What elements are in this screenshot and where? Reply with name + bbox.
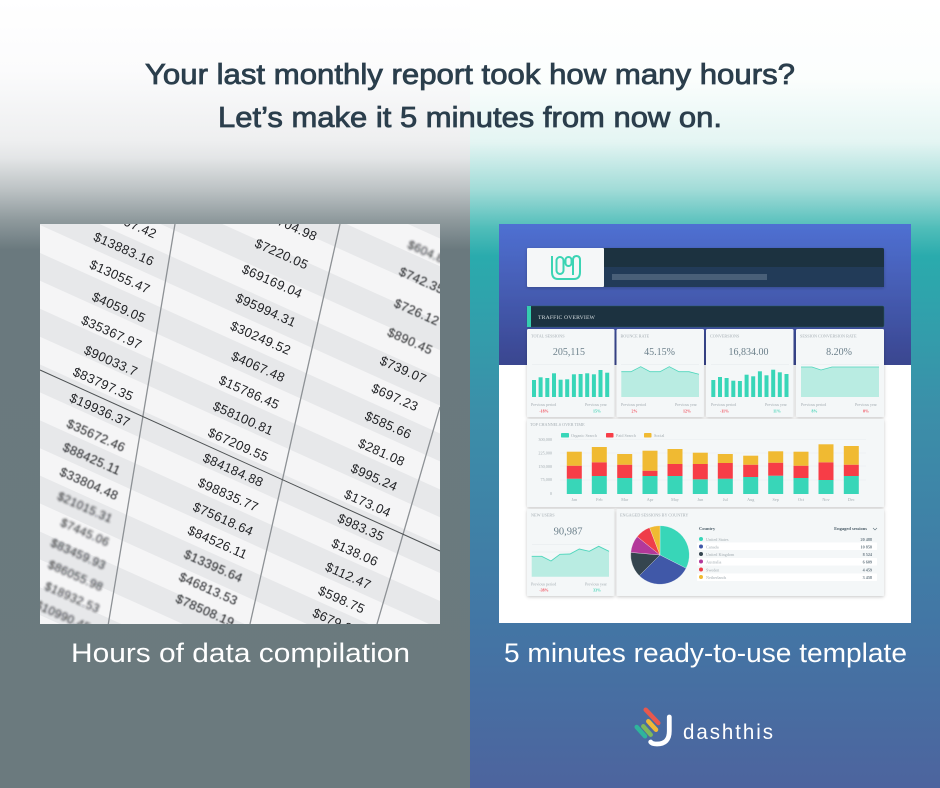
card: total sessions: 205,115 xyxy=(553,347,585,358)
card: total sessions: Previous year xyxy=(585,402,608,407)
y axis: 75,000 xyxy=(540,477,552,483)
sharp numbers: $83797.35 xyxy=(71,364,136,404)
stacked bars xyxy=(567,444,859,494)
card: new users: Previous year xyxy=(585,582,608,586)
x axis months: Jul xyxy=(723,497,729,502)
card: session conversion rate: 8% xyxy=(812,408,818,414)
country table: 6 609 xyxy=(863,560,872,564)
card: total sessions xyxy=(527,329,614,417)
country table: United States xyxy=(706,537,729,542)
card: new users xyxy=(527,509,614,596)
card: session conversion rate xyxy=(796,329,884,417)
sharp numbers: $598.75 xyxy=(316,583,367,617)
card: new users: 90,987 xyxy=(554,526,582,538)
slightly blurred numbers: $35672.46 xyxy=(65,417,127,455)
card: session conversion rate: Previous period xyxy=(801,402,826,407)
sharp numbers: $30249.52 xyxy=(228,318,293,358)
card: bounce rate: 45.15% xyxy=(644,347,675,358)
slightly blurred numbers: $742.35 xyxy=(397,265,446,297)
slightly blurred numbers: $13395.64 xyxy=(182,547,245,585)
dashboard header xyxy=(527,248,884,287)
x axis months: Aug xyxy=(747,497,755,502)
country table: Canada xyxy=(706,544,719,550)
x axis months: Jan xyxy=(572,497,578,502)
card: session conversion rate: 8.20% xyxy=(826,347,852,358)
card: engaged sessions by country xyxy=(616,509,884,596)
section bar: traffic overview xyxy=(527,306,884,327)
country table: 4 459 xyxy=(863,568,872,572)
card: bounce rate xyxy=(616,329,704,417)
sharp numbers: $4059.05 xyxy=(90,289,148,326)
card: bounce rate: Previous year xyxy=(675,402,698,407)
blurred numbers: $18932.53 xyxy=(43,579,102,616)
left background panel xyxy=(0,0,470,788)
panel: dashboard screenshot xyxy=(499,224,911,623)
sharp numbers: $13055.47 xyxy=(87,257,153,297)
country table: Netherlands xyxy=(706,575,727,580)
card: engaged sessions by country: ENGAGED SESSIONS BY COUNTRY xyxy=(620,512,688,518)
sharp numbers: $95994.31 xyxy=(233,290,299,330)
card: conversions: 11% xyxy=(773,408,781,414)
country table: Australia xyxy=(706,560,721,564)
slightly blurred numbers: $88425.11 xyxy=(61,440,123,478)
sharp numbers: $67209.55 xyxy=(206,425,271,465)
sharp numbers: $58100.81 xyxy=(211,398,276,438)
x axis months: May xyxy=(671,497,680,502)
title: Let’s make it 5 minutes from now on. xyxy=(218,102,722,134)
y axis: 0 xyxy=(550,491,552,496)
sharp numbers: $35367.97 xyxy=(79,312,144,352)
caption: right: 5 minutes ready-to-use template xyxy=(504,638,907,668)
sharp numbers: $112.47 xyxy=(323,559,373,592)
sharp numbers: $13883.16 xyxy=(91,229,157,269)
y axis: 150,000 xyxy=(538,464,552,470)
country table: 8 524 xyxy=(863,552,873,557)
chart: top channels over time: TOP CHANNELS OVER TIME xyxy=(530,422,585,427)
country table: United Kingdom xyxy=(706,552,735,557)
x axis months xyxy=(572,497,855,502)
slightly blurred numbers xyxy=(58,265,446,630)
y axis: 225,000 xyxy=(538,450,552,456)
x axis months: Sep xyxy=(773,497,779,502)
country table: 3 458 xyxy=(863,575,872,580)
chart legend: Paid Search xyxy=(616,433,637,438)
icon: dashthis logo xyxy=(637,710,669,744)
card: conversions: Previous year xyxy=(765,402,788,407)
slightly blurred numbers: $46813.53 xyxy=(177,570,240,608)
x axis months: Nov xyxy=(822,497,831,502)
sharp numbers: $69169.04 xyxy=(240,261,305,301)
sharp numbers: $7597.42 xyxy=(101,205,159,241)
card: new users: -38% xyxy=(539,588,549,592)
pie chart xyxy=(631,526,689,584)
card: total sessions: 15% xyxy=(593,408,601,414)
card: session conversion rate: Previous year xyxy=(855,402,878,407)
x axis months: Feb xyxy=(596,497,602,502)
country table: Sweden xyxy=(706,568,720,572)
chart: top channels over time xyxy=(527,419,884,507)
sharp numbers: $25704.98 xyxy=(254,204,320,244)
chart legend xyxy=(561,433,665,438)
x axis months: Apr xyxy=(647,497,654,502)
section bar: traffic overview: TRAFFIC OVERVIEW xyxy=(538,315,596,321)
sharp numbers: $75618.64 xyxy=(191,499,256,539)
sharp numbers: $995.24 xyxy=(349,460,400,494)
card: total sessions: -18% xyxy=(539,408,549,414)
title xyxy=(145,59,795,134)
card: session conversion rate: 0% xyxy=(863,408,869,414)
right background panel xyxy=(470,0,940,788)
sharp numbers xyxy=(67,204,429,639)
sharp numbers: $4067.48 xyxy=(229,348,287,385)
title: Your last monthly report took how many hours? xyxy=(145,59,795,91)
blurred numbers: $7445.06 xyxy=(58,515,112,549)
sharp numbers: $90033.7 xyxy=(82,342,140,379)
sharp numbers: $281.08 xyxy=(356,435,407,469)
card: session conversion rate: SESSION CONVERSION RATE xyxy=(800,334,857,338)
card: conversions: CONVERSIONS xyxy=(710,334,740,338)
chart legend: Social xyxy=(654,433,665,438)
sharp numbers: $585.66 xyxy=(363,408,414,442)
card: total sessions: Previous period xyxy=(531,402,556,407)
card: new users: NEW USERS xyxy=(531,512,555,518)
sharp numbers: $7220.05 xyxy=(253,236,311,272)
blurred numbers: $83459.93 xyxy=(49,536,108,572)
card: new users: 33% xyxy=(593,588,601,592)
sharp numbers: $15786.45 xyxy=(217,372,282,412)
card: new users: Previous period xyxy=(531,582,556,586)
chart legend: Organic Search xyxy=(571,433,598,438)
column and row lines xyxy=(40,224,440,624)
sharp numbers: $98835.77 xyxy=(196,475,261,515)
card: conversions: -11% xyxy=(720,408,729,414)
blurred numbers: $21015.31 xyxy=(55,489,115,526)
card: bounce rate: 12% xyxy=(683,408,691,414)
card: bounce rate: Previous period xyxy=(621,402,646,407)
sharp numbers: $983.35 xyxy=(335,510,387,544)
slightly blurred numbers: $33804.48 xyxy=(58,465,120,503)
sharp numbers: $19936.37 xyxy=(67,390,133,430)
y axis: 300,000 xyxy=(538,437,552,443)
country table: 20 488 xyxy=(860,537,872,542)
card: bounce rate: 2% xyxy=(632,408,638,414)
icon: client logo xyxy=(552,256,580,279)
card: bounce rate: BOUNCE RATE xyxy=(620,334,650,338)
card: conversions: 16,834.00 xyxy=(728,347,768,358)
x axis months: Jun xyxy=(697,497,704,502)
blurred numbers: $86055.98 xyxy=(46,557,106,594)
country table: 10 858 xyxy=(860,544,872,550)
country table: Engaged sessions xyxy=(834,526,867,531)
sharp numbers: $679.32 xyxy=(310,605,362,639)
blurred numbers xyxy=(33,237,452,634)
y axis xyxy=(538,437,552,496)
card: conversions xyxy=(706,329,794,417)
slightly blurred numbers: $890.45 xyxy=(385,325,435,357)
slightly blurred numbers: $726.12 xyxy=(392,296,441,328)
blurred numbers: $10990.45 xyxy=(33,598,93,634)
blurred numbers: $604.87 xyxy=(406,237,452,269)
country table xyxy=(697,526,877,581)
brand name: dashthis xyxy=(683,721,775,744)
sharp numbers: $138.06 xyxy=(329,535,381,569)
sharp numbers: $84184.88 xyxy=(201,450,266,490)
caption: left: Hours of data compilation xyxy=(71,638,410,668)
sharp numbers: $739.07 xyxy=(378,353,429,387)
x axis months: Mar xyxy=(621,497,629,502)
panel: spreadsheet photo xyxy=(40,224,440,624)
x axis months: Dec xyxy=(848,497,855,502)
country table: Country xyxy=(699,526,716,531)
sharp numbers: $84526.11 xyxy=(186,523,250,562)
sharp numbers: $697.23 xyxy=(369,380,421,414)
card: conversions: Previous period xyxy=(711,402,736,407)
card: total sessions: TOTAL SESSIONS xyxy=(531,334,565,338)
row stripes xyxy=(40,224,440,624)
x axis months: Oct xyxy=(798,497,805,502)
sharp numbers: $173.04 xyxy=(342,486,393,520)
slightly blurred numbers: $78508.19 xyxy=(174,592,236,630)
